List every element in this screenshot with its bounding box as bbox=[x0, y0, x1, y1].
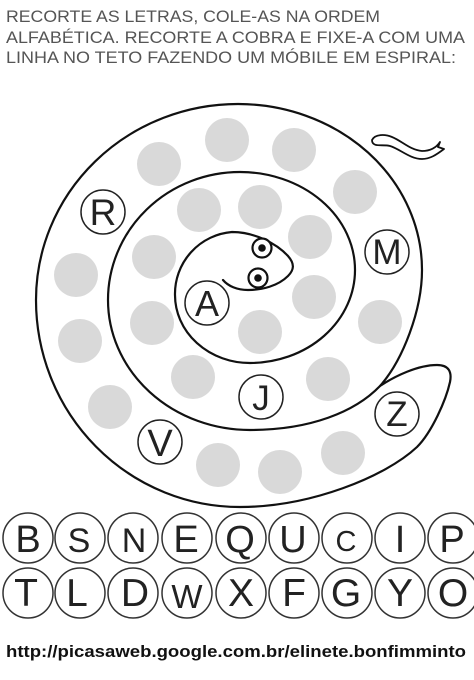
letters row 1: N bbox=[122, 522, 146, 560]
letters text on snake: Z bbox=[386, 395, 408, 434]
title: instructions: RECORTE AS LETRAS, COLE-AS NA ORDEM bbox=[6, 7, 380, 26]
letters text on snake: V bbox=[147, 423, 173, 465]
letters row 1: U bbox=[279, 519, 307, 561]
letters text on snake: J bbox=[252, 379, 270, 418]
letters row 2: G bbox=[331, 572, 361, 615]
cut-out letter circles bbox=[3, 513, 474, 618]
letters text on snake: A bbox=[195, 283, 219, 324]
letters row 1 bbox=[15, 519, 465, 561]
letters placed on snake bbox=[81, 190, 419, 464]
letters text on snake: R bbox=[90, 192, 116, 233]
letters row 2: T bbox=[14, 572, 38, 615]
tongue bbox=[372, 135, 444, 159]
letters row 1: Q bbox=[225, 519, 255, 561]
letters row 1: I bbox=[395, 519, 405, 561]
letters row 1: P bbox=[439, 519, 465, 561]
snake outer outline with tail bbox=[36, 104, 451, 507]
letters row 1: E bbox=[173, 519, 199, 561]
spiral snake bbox=[36, 104, 451, 507]
letters text on snake: M bbox=[372, 233, 402, 272]
letters row 1: S bbox=[68, 522, 90, 560]
letters row 2: F bbox=[282, 572, 306, 615]
eye: lower bbox=[248, 268, 268, 288]
title: instructions bbox=[6, 7, 466, 67]
letters row 2: W bbox=[171, 578, 203, 615]
title: instructions: ALFABÉTICA. RECORTE A COBRA E FIXE-A COM UMA bbox=[6, 28, 466, 47]
letters row 2: O bbox=[438, 572, 468, 615]
letters row 2: X bbox=[228, 572, 254, 615]
title: instructions: LINHA NO TETO FAZENDO UM MÓBILE EM ESPIRAL: bbox=[6, 48, 456, 67]
gray letter placeholders bbox=[54, 118, 402, 494]
letters row 2 bbox=[14, 572, 468, 615]
eye: upper bbox=[252, 238, 272, 258]
circle outlines bbox=[3, 513, 474, 618]
letters row 2: L bbox=[66, 572, 88, 615]
letters text on snake bbox=[90, 192, 408, 465]
letters row 1: C bbox=[336, 526, 356, 558]
snake inner spiral and head bbox=[108, 172, 380, 430]
letters row 2: D bbox=[121, 572, 149, 615]
source url: http://picasaweb.google.com.br/elinete.bonfimminto bbox=[6, 642, 466, 661]
letters row 1: B bbox=[15, 519, 41, 561]
letters row 2: Y bbox=[387, 572, 413, 615]
